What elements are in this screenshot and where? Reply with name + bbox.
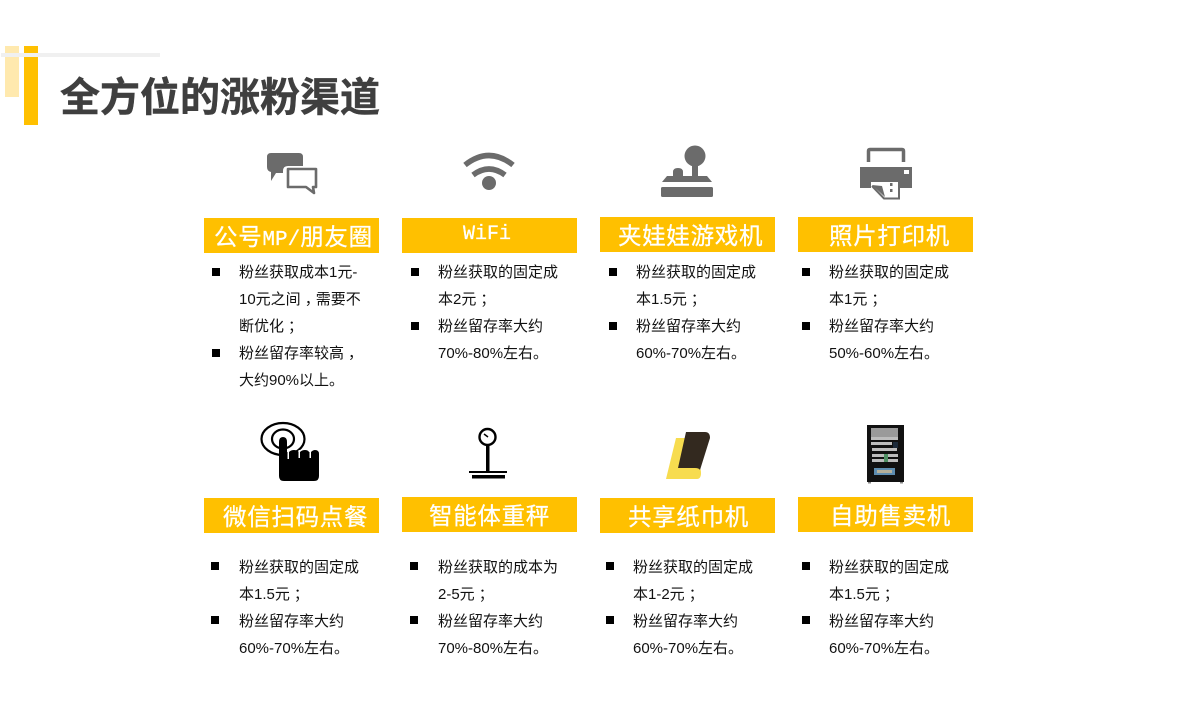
text: 断优化 ； — [239, 318, 303, 335]
heading: 共享纸巾机: 共享纸巾机 — [628, 498, 749, 532]
text: 粉丝留存率大约 — [239, 613, 344, 630]
heading: 智能体重秤: 智能体重秤 — [429, 497, 550, 531]
icon: printer — [860, 148, 912, 200]
heading: 智能体重秤 — [402, 497, 577, 532]
heading: 公号MP/朋友圈: 公号MP/朋友圈 — [214, 218, 373, 252]
title: 全方位的涨粉渠道 — [60, 76, 380, 120]
text: 本1-2元 ； — [633, 586, 704, 603]
decorative corner bars — [1, 46, 160, 125]
heading: 共享纸巾机 — [600, 498, 775, 533]
text: 粉丝获取的固定成 — [438, 264, 558, 281]
icon: chat bubbles — [267, 153, 318, 194]
text: 10元之间 ，需要不 — [239, 291, 361, 308]
text: 大约90%以上。 — [239, 372, 344, 389]
heading: 自助售卖机: 自助售卖机 — [830, 497, 951, 531]
text: 粉丝留存率大约 — [829, 613, 934, 630]
text: 粉丝留存率大约 — [438, 613, 543, 630]
text: 粉丝获取的固定成 — [636, 264, 756, 281]
text: 粉丝获取的固定成 — [829, 264, 949, 281]
text: 60%-70%左右。 — [239, 640, 349, 657]
text: 本1.5元 ； — [636, 291, 706, 308]
text: 公号 details — [212, 264, 363, 389]
text: 70%-80%左右。 — [438, 345, 548, 362]
text: 粉丝留存率大约 — [633, 613, 738, 630]
text: 粉丝获取的固定成 — [239, 559, 359, 576]
text: 照片打印机 details — [802, 264, 949, 362]
heading: 自助售卖机 — [798, 497, 973, 532]
heading: 微信扫码点餐: 微信扫码点餐 — [223, 498, 368, 532]
text: 纸巾机 details — [606, 559, 753, 657]
text: 夹娃娃机 details — [609, 264, 756, 362]
text: 售卖机 details — [802, 559, 949, 657]
text: 60%-70%左右。 — [633, 640, 743, 657]
text: WiFi details — [411, 264, 558, 362]
text: 粉丝留存率大约 — [438, 318, 543, 335]
heading: 照片打印机 — [798, 217, 973, 252]
text: 50%-60%左右。 — [829, 345, 939, 362]
heading: WiFi: WiFi — [463, 223, 511, 246]
text: 本1.5元 ； — [239, 586, 309, 603]
text: 70%-80%左右。 — [438, 640, 548, 657]
text: 粉丝获取的成本为 — [438, 559, 558, 576]
icon: wifi — [463, 152, 515, 190]
icon: tapping hand — [260, 422, 319, 481]
text: 粉丝获取的固定成 — [829, 559, 949, 576]
text: 本2元 ； — [438, 291, 495, 308]
text: 60%-70%左右。 — [636, 345, 746, 362]
text: 本1元 ； — [829, 291, 886, 308]
text: 体重秤 details — [410, 559, 558, 657]
icon: vending machine — [867, 425, 904, 484]
text: 本1.5元 ； — [829, 586, 899, 603]
text: 扫码点餐 details — [211, 559, 359, 657]
text: 粉丝留存率大约 — [636, 318, 741, 335]
heading: 照片打印机: 照片打印机 — [829, 217, 950, 251]
heading: WiFi — [402, 218, 577, 253]
icon: weighing scale — [469, 428, 507, 478]
text: 粉丝留存率大约 — [829, 318, 934, 335]
text: 60%-70%左右。 — [829, 640, 939, 657]
heading: 夹娃娃游戏机: 夹娃娃游戏机 — [618, 217, 763, 251]
text: 粉丝获取成本1元- — [239, 264, 357, 281]
text: 粉丝获取的固定成 — [633, 559, 753, 576]
icon: arcade joystick — [661, 146, 713, 197]
icon: tissue pack — [666, 432, 710, 479]
text: 2-5元 ； — [438, 586, 494, 603]
text: 粉丝留存率较高 ， — [239, 345, 363, 362]
